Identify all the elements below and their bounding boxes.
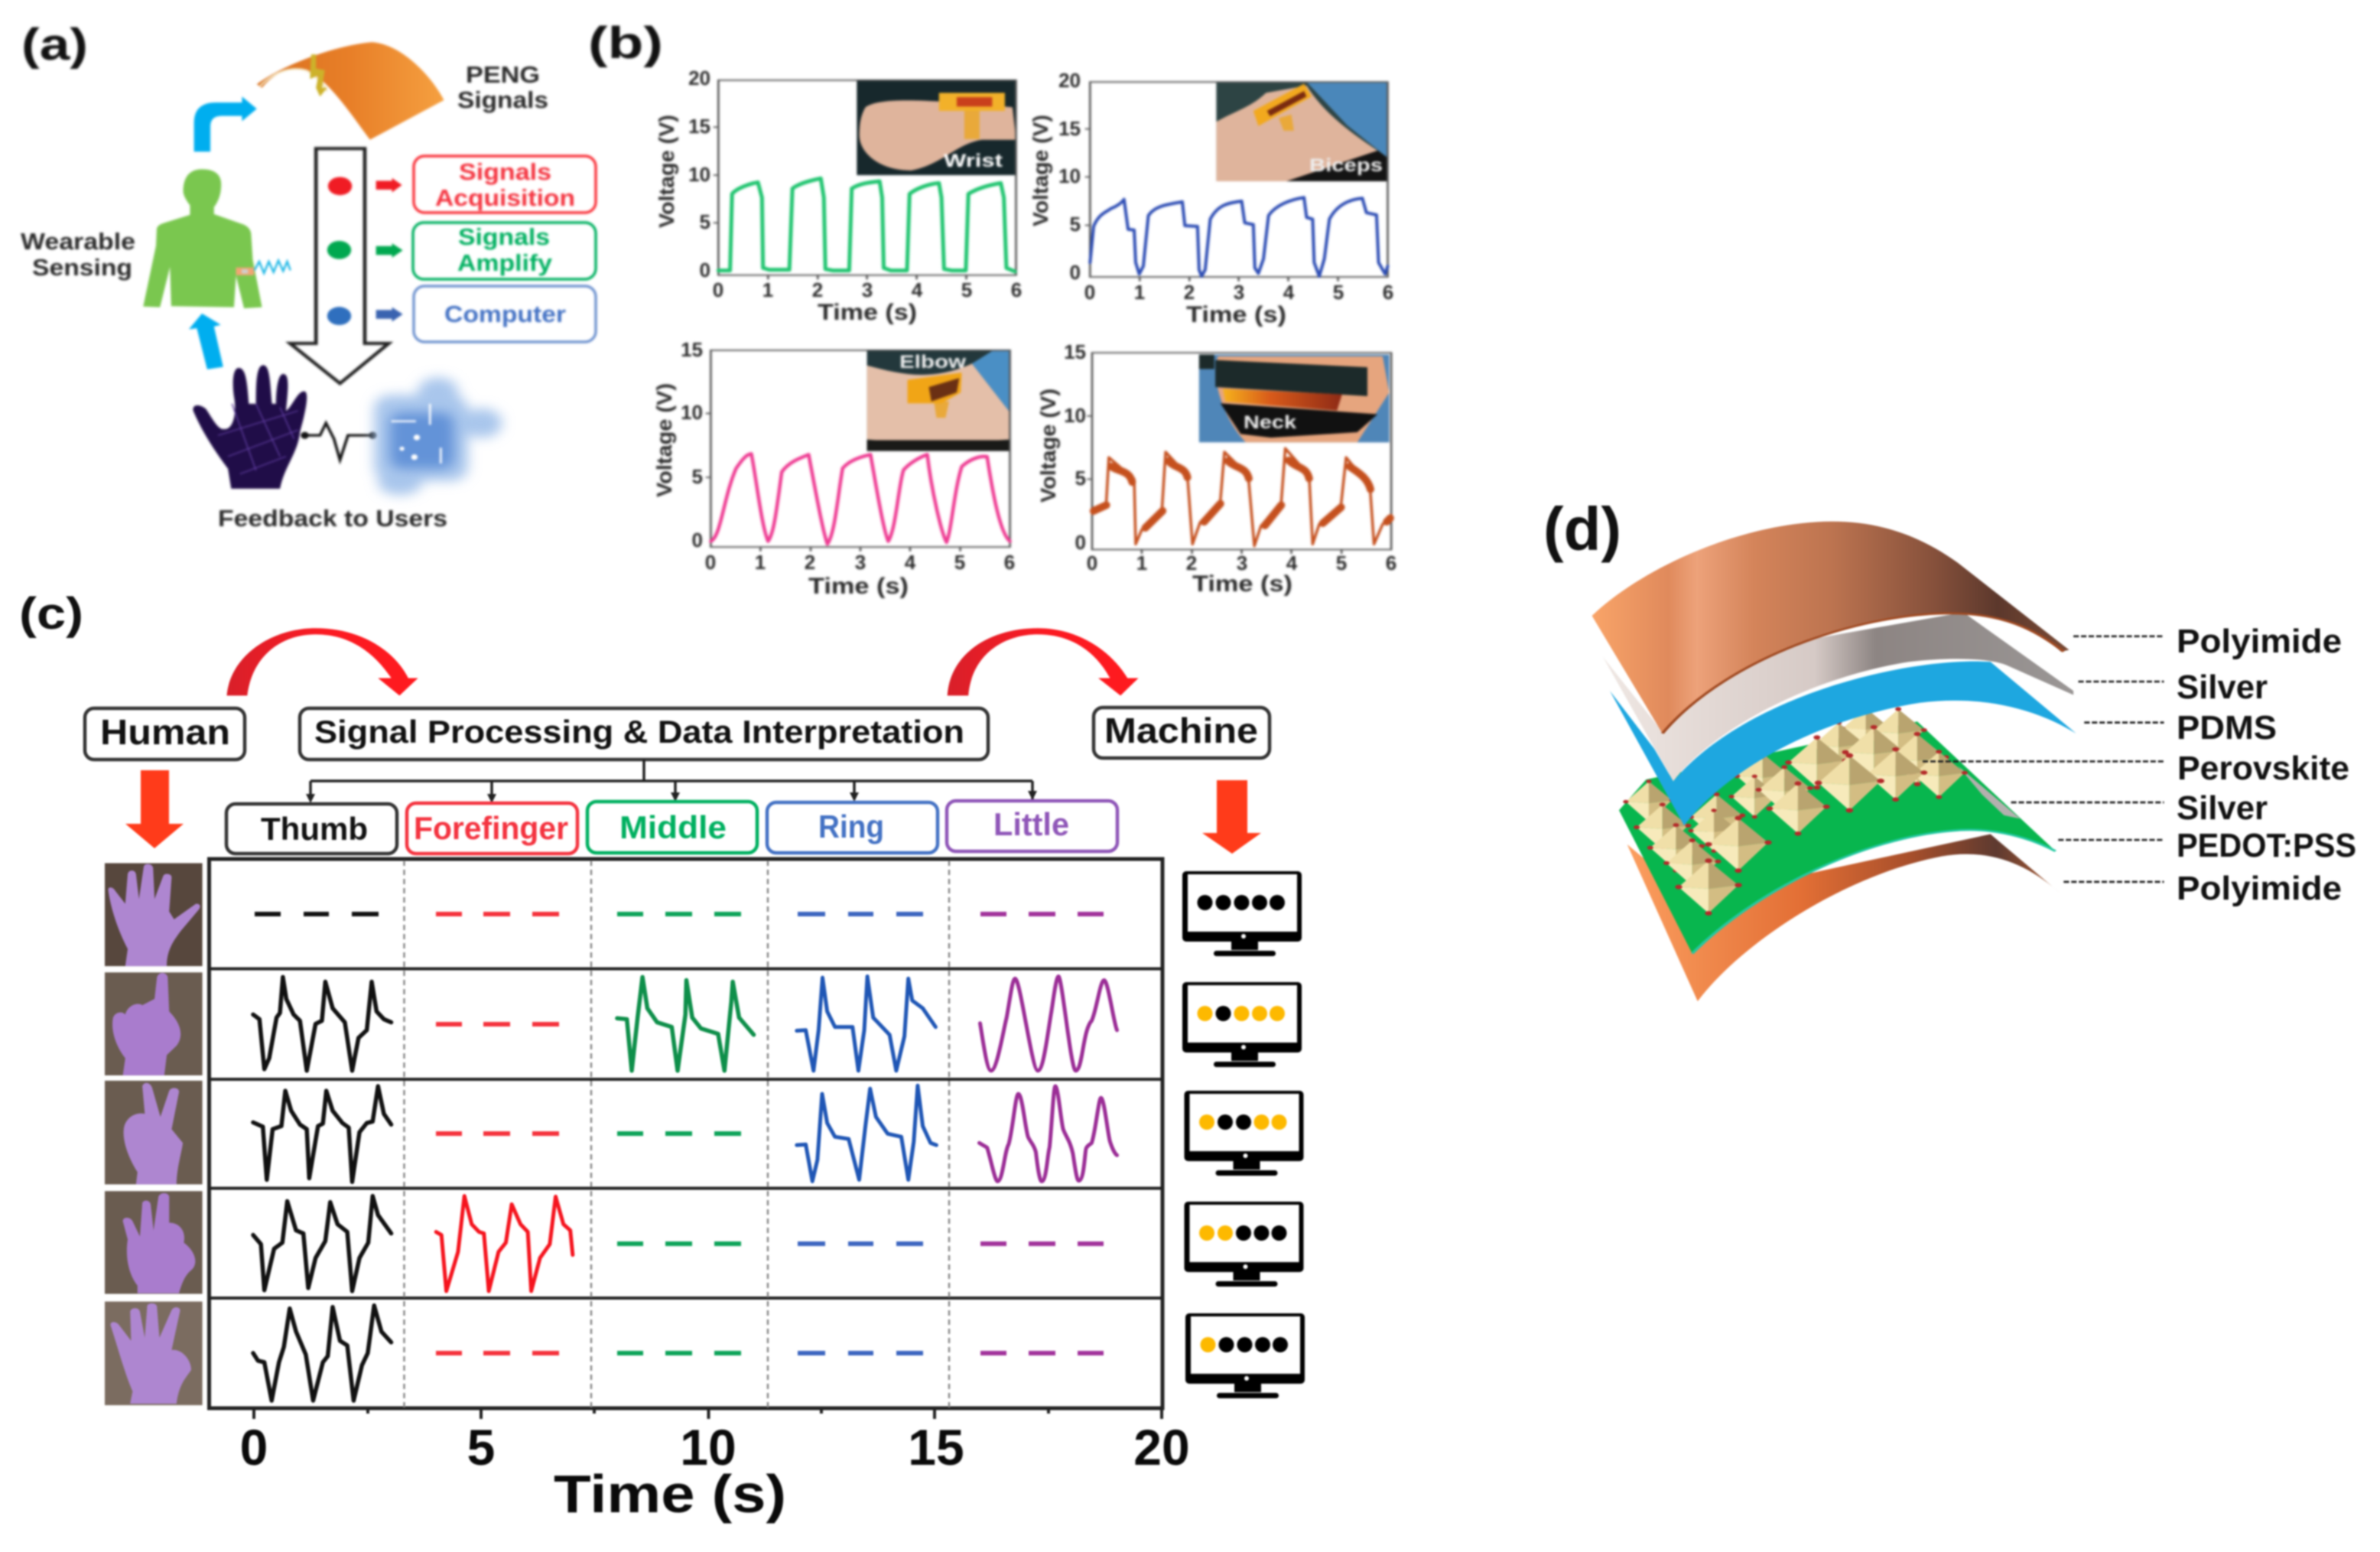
axis titles	[655, 115, 917, 325]
tick labels: 0	[1075, 531, 1086, 554]
tick labels: 10	[1064, 404, 1086, 427]
heading: (b): (b)	[588, 18, 663, 68]
box: Signals Amplify	[413, 223, 596, 279]
axis titles	[1029, 115, 1286, 327]
photo: two fingers, row 3	[105, 1081, 203, 1184]
box: Middle	[587, 802, 757, 853]
labels: layer names: Silver	[2177, 789, 2268, 827]
icon: human body silhouette with sensor	[143, 169, 291, 308]
axis numbers: 0	[240, 1419, 268, 1476]
connector tree to finger boxes	[306, 760, 1037, 803]
tick labels	[1058, 69, 1393, 304]
tick labels: 6	[1004, 551, 1015, 574]
labels: layer names: PDMS	[2177, 709, 2277, 747]
tick labels: 4	[912, 278, 923, 301]
tick labels: 15	[1058, 117, 1081, 140]
tick labels: 6	[1383, 281, 1393, 304]
axis titles: Time (s)	[808, 574, 909, 599]
labels: layer names: Silver	[2177, 669, 2268, 706]
axis numbers: 10	[680, 1419, 736, 1476]
arrows: stage pointers	[376, 178, 403, 321]
label: PENG Signals: Signals	[457, 86, 548, 113]
photo: elbow inset	[867, 350, 1010, 451]
layer: perovskite octahedra	[1623, 706, 1968, 916]
box: Forefinger	[407, 803, 577, 854]
label: Wearable Sensing	[21, 228, 135, 281]
box: Forefinger: Forefinger	[414, 810, 568, 846]
label: PENG Signals: PENG	[466, 61, 540, 88]
box: Human: Human	[100, 712, 230, 752]
tick labels: 15	[1064, 340, 1086, 363]
tick labels: 0	[1084, 281, 1095, 304]
waveform: row 5 thumb	[253, 1306, 392, 1401]
photo: wrist inset	[857, 80, 1016, 175]
waveforms: row 3	[253, 1085, 1117, 1182]
heading: (d): (d)	[1543, 495, 1621, 563]
trace: elbow	[710, 454, 1010, 544]
arrow: red arc human to signal processing	[227, 628, 418, 695]
photo: three fingers, row 4	[105, 1191, 203, 1294]
tick labels: 4	[1286, 551, 1298, 574]
axis numbers	[240, 1419, 1190, 1476]
label: PENG Signals	[457, 61, 548, 113]
panel a: wearable sensing workflow	[21, 20, 596, 532]
panel d: device layer stack	[1543, 495, 2356, 1001]
axis titles: Voltage (V)	[1036, 389, 1060, 503]
box: Signals Acquisition: Acquisition	[435, 184, 575, 211]
box: Little	[947, 801, 1117, 851]
icon: monitor row 2	[1182, 982, 1302, 1067]
box: Signal Processing and Data Interpretation: Signal Processing & Data Interpretation	[314, 714, 964, 750]
axis titles	[652, 383, 909, 599]
box: Signals Acquisition	[414, 156, 596, 213]
box: Ring	[767, 802, 938, 853]
tick labels: 5	[1333, 281, 1344, 304]
layer: top polyimide	[1592, 522, 2069, 734]
tick labels: 15	[688, 115, 710, 138]
label: Wearable Sensing: Wearable	[21, 228, 135, 255]
icon: monitor row 1	[1182, 871, 1302, 956]
tick labels: 1	[762, 278, 773, 301]
photo: four fingers, row 5	[105, 1302, 203, 1405]
axis numbers: 15	[908, 1419, 964, 1476]
axes	[1085, 82, 1388, 281]
tick labels: 3	[855, 551, 866, 574]
panel b: voltage charts	[588, 18, 1396, 599]
label: Biceps: Biceps	[1309, 155, 1383, 176]
axis titles: Time (s)	[1192, 571, 1292, 597]
tick labels: 3	[862, 278, 873, 301]
axis titles: Time (s)	[1186, 302, 1286, 327]
box: Little: Little	[993, 806, 1069, 842]
arrow: body to film	[194, 96, 257, 151]
waveforms: row 2	[253, 977, 1117, 1071]
tick labels: 20	[1058, 69, 1081, 92]
icon: monitor row 3	[1184, 1091, 1303, 1176]
waveforms: row 4	[253, 1196, 573, 1291]
tick labels: 0	[1070, 261, 1081, 284]
box: Human	[85, 708, 245, 760]
tick labels	[1064, 340, 1396, 574]
box: Ring: Ring	[818, 809, 884, 844]
tick labels: 3	[1234, 281, 1244, 304]
tick labels: 1	[1134, 281, 1145, 304]
arrow: red arc processing to machine	[948, 628, 1139, 695]
icon: pulse waveform	[301, 423, 377, 460]
box: Thumb: Thumb	[261, 811, 368, 847]
icon: flexible PENG film	[257, 42, 444, 140]
tick labels: 0	[1087, 551, 1097, 574]
label: Wrist: Wrist	[944, 151, 1003, 171]
tick labels: 20	[688, 67, 710, 89]
axis numbers: 5	[467, 1419, 495, 1476]
tick labels: 5	[1075, 467, 1086, 490]
tick labels: 1	[755, 551, 766, 574]
tick labels: 0	[713, 278, 723, 301]
label: Elbow: Elbow	[899, 352, 966, 373]
tick labels: 2	[805, 551, 815, 574]
box: Signals Amplify: Amplify	[457, 249, 553, 276]
leader lines	[1923, 636, 2164, 882]
tick labels: 6	[1011, 278, 1022, 301]
labels: layer names	[2177, 623, 2356, 907]
axis title: Time (s): Time (s)	[554, 1464, 786, 1524]
arrow: large outlined down arrow with stage dots	[290, 148, 389, 383]
tick labels: 5	[1336, 551, 1347, 574]
box: Signals Amplify: Signals	[458, 223, 550, 250]
tick labels: 1	[1136, 551, 1147, 574]
photo: biceps inset	[1216, 82, 1388, 181]
photo: neck inset	[1199, 355, 1389, 442]
tick labels: 10	[688, 163, 710, 186]
layer: upper silver	[1603, 613, 2073, 781]
labels: layer names: PEDOT:PSS	[2177, 827, 2356, 864]
labels: layer names: Polyimide	[2177, 870, 2342, 907]
icon: monitor row 5	[1185, 1313, 1305, 1398]
tick labels	[681, 338, 1015, 574]
layer: bottom polyimide	[1627, 834, 2061, 1001]
chart: biceps voltage	[1029, 69, 1393, 327]
chart: elbow voltage	[652, 338, 1015, 599]
tick labels: 2	[1184, 281, 1195, 304]
axis titles	[1036, 389, 1292, 597]
chart: neck voltage	[1036, 340, 1396, 597]
dashes: inactive finger markers	[255, 914, 1104, 1353]
layer: lower silver	[1958, 766, 2021, 818]
box: Machine: Machine	[1104, 711, 1258, 750]
tick labels: 10	[1058, 164, 1081, 187]
tick labels: 4	[905, 551, 916, 574]
table grid	[209, 859, 1162, 1419]
axes	[714, 80, 1016, 279]
tick labels: 5	[954, 551, 965, 574]
icon: monitor row 4	[1184, 1202, 1303, 1287]
trace: biceps	[1090, 197, 1388, 276]
axis numbers: 20	[1133, 1419, 1190, 1476]
heading: (a): (a)	[21, 20, 88, 70]
box: Computer	[414, 286, 596, 342]
tick labels: 15	[681, 338, 703, 361]
chart: wrist voltage	[655, 67, 1022, 325]
box: Thumb	[226, 804, 397, 854]
tick labels: 3	[1237, 551, 1247, 574]
illustration: layer stack	[1592, 522, 2076, 1001]
axes	[706, 350, 1010, 551]
tick labels: 0	[705, 551, 716, 574]
axis titles: Voltage (V)	[655, 115, 678, 228]
tick labels: 10	[681, 401, 703, 424]
layer: PEDOT:PSS	[1619, 721, 2056, 954]
heading: (c): (c)	[19, 589, 83, 639]
layer: PDMS	[1610, 662, 2076, 825]
icon: blurred circuit chip	[374, 377, 502, 495]
box: Signals Acquisition: Signals	[459, 158, 551, 185]
tick labels: 5	[692, 465, 703, 488]
photo: open hand, row 1	[105, 863, 203, 966]
tick labels: 0	[692, 529, 703, 551]
arrow: feedback hand to body	[189, 314, 223, 369]
tick labels: 4	[1283, 281, 1295, 304]
tick labels: 2	[812, 278, 823, 301]
tick labels: 5	[961, 278, 972, 301]
axis titles: Time (s)	[818, 300, 917, 325]
tick labels	[688, 67, 1022, 301]
axes	[1087, 353, 1391, 554]
box: Signal Processing and Data Interpretation	[300, 708, 988, 760]
axis titles: Voltage (V)	[1029, 115, 1052, 226]
trace: neck	[1092, 448, 1391, 546]
label: Neck: Neck	[1244, 412, 1297, 433]
tick labels: 2	[1186, 551, 1197, 574]
tick labels: 0	[700, 259, 710, 281]
box: Machine	[1094, 708, 1270, 758]
tick labels: 5	[1070, 213, 1081, 236]
tick labels: 5	[700, 210, 710, 233]
box: Middle: Middle	[619, 809, 727, 845]
tick labels: 6	[1386, 551, 1396, 574]
trace: wrist	[718, 178, 1015, 272]
arrow: human down	[125, 770, 184, 848]
photo: one finger, row 2	[105, 972, 203, 1075]
label: Feedback to Users: Feedback to Users	[218, 505, 447, 532]
icon: dark hand	[193, 365, 307, 489]
labels: layer names: Polyimide	[2177, 623, 2342, 660]
arrow: machine down	[1202, 780, 1261, 854]
axis titles: Voltage (V)	[652, 383, 676, 497]
panel c: gesture recognition	[19, 589, 1305, 1524]
box: Computer: Computer	[444, 301, 566, 327]
labels: layer names: Perovskite	[2177, 750, 2349, 787]
label: Wearable Sensing: Sensing	[32, 254, 132, 281]
